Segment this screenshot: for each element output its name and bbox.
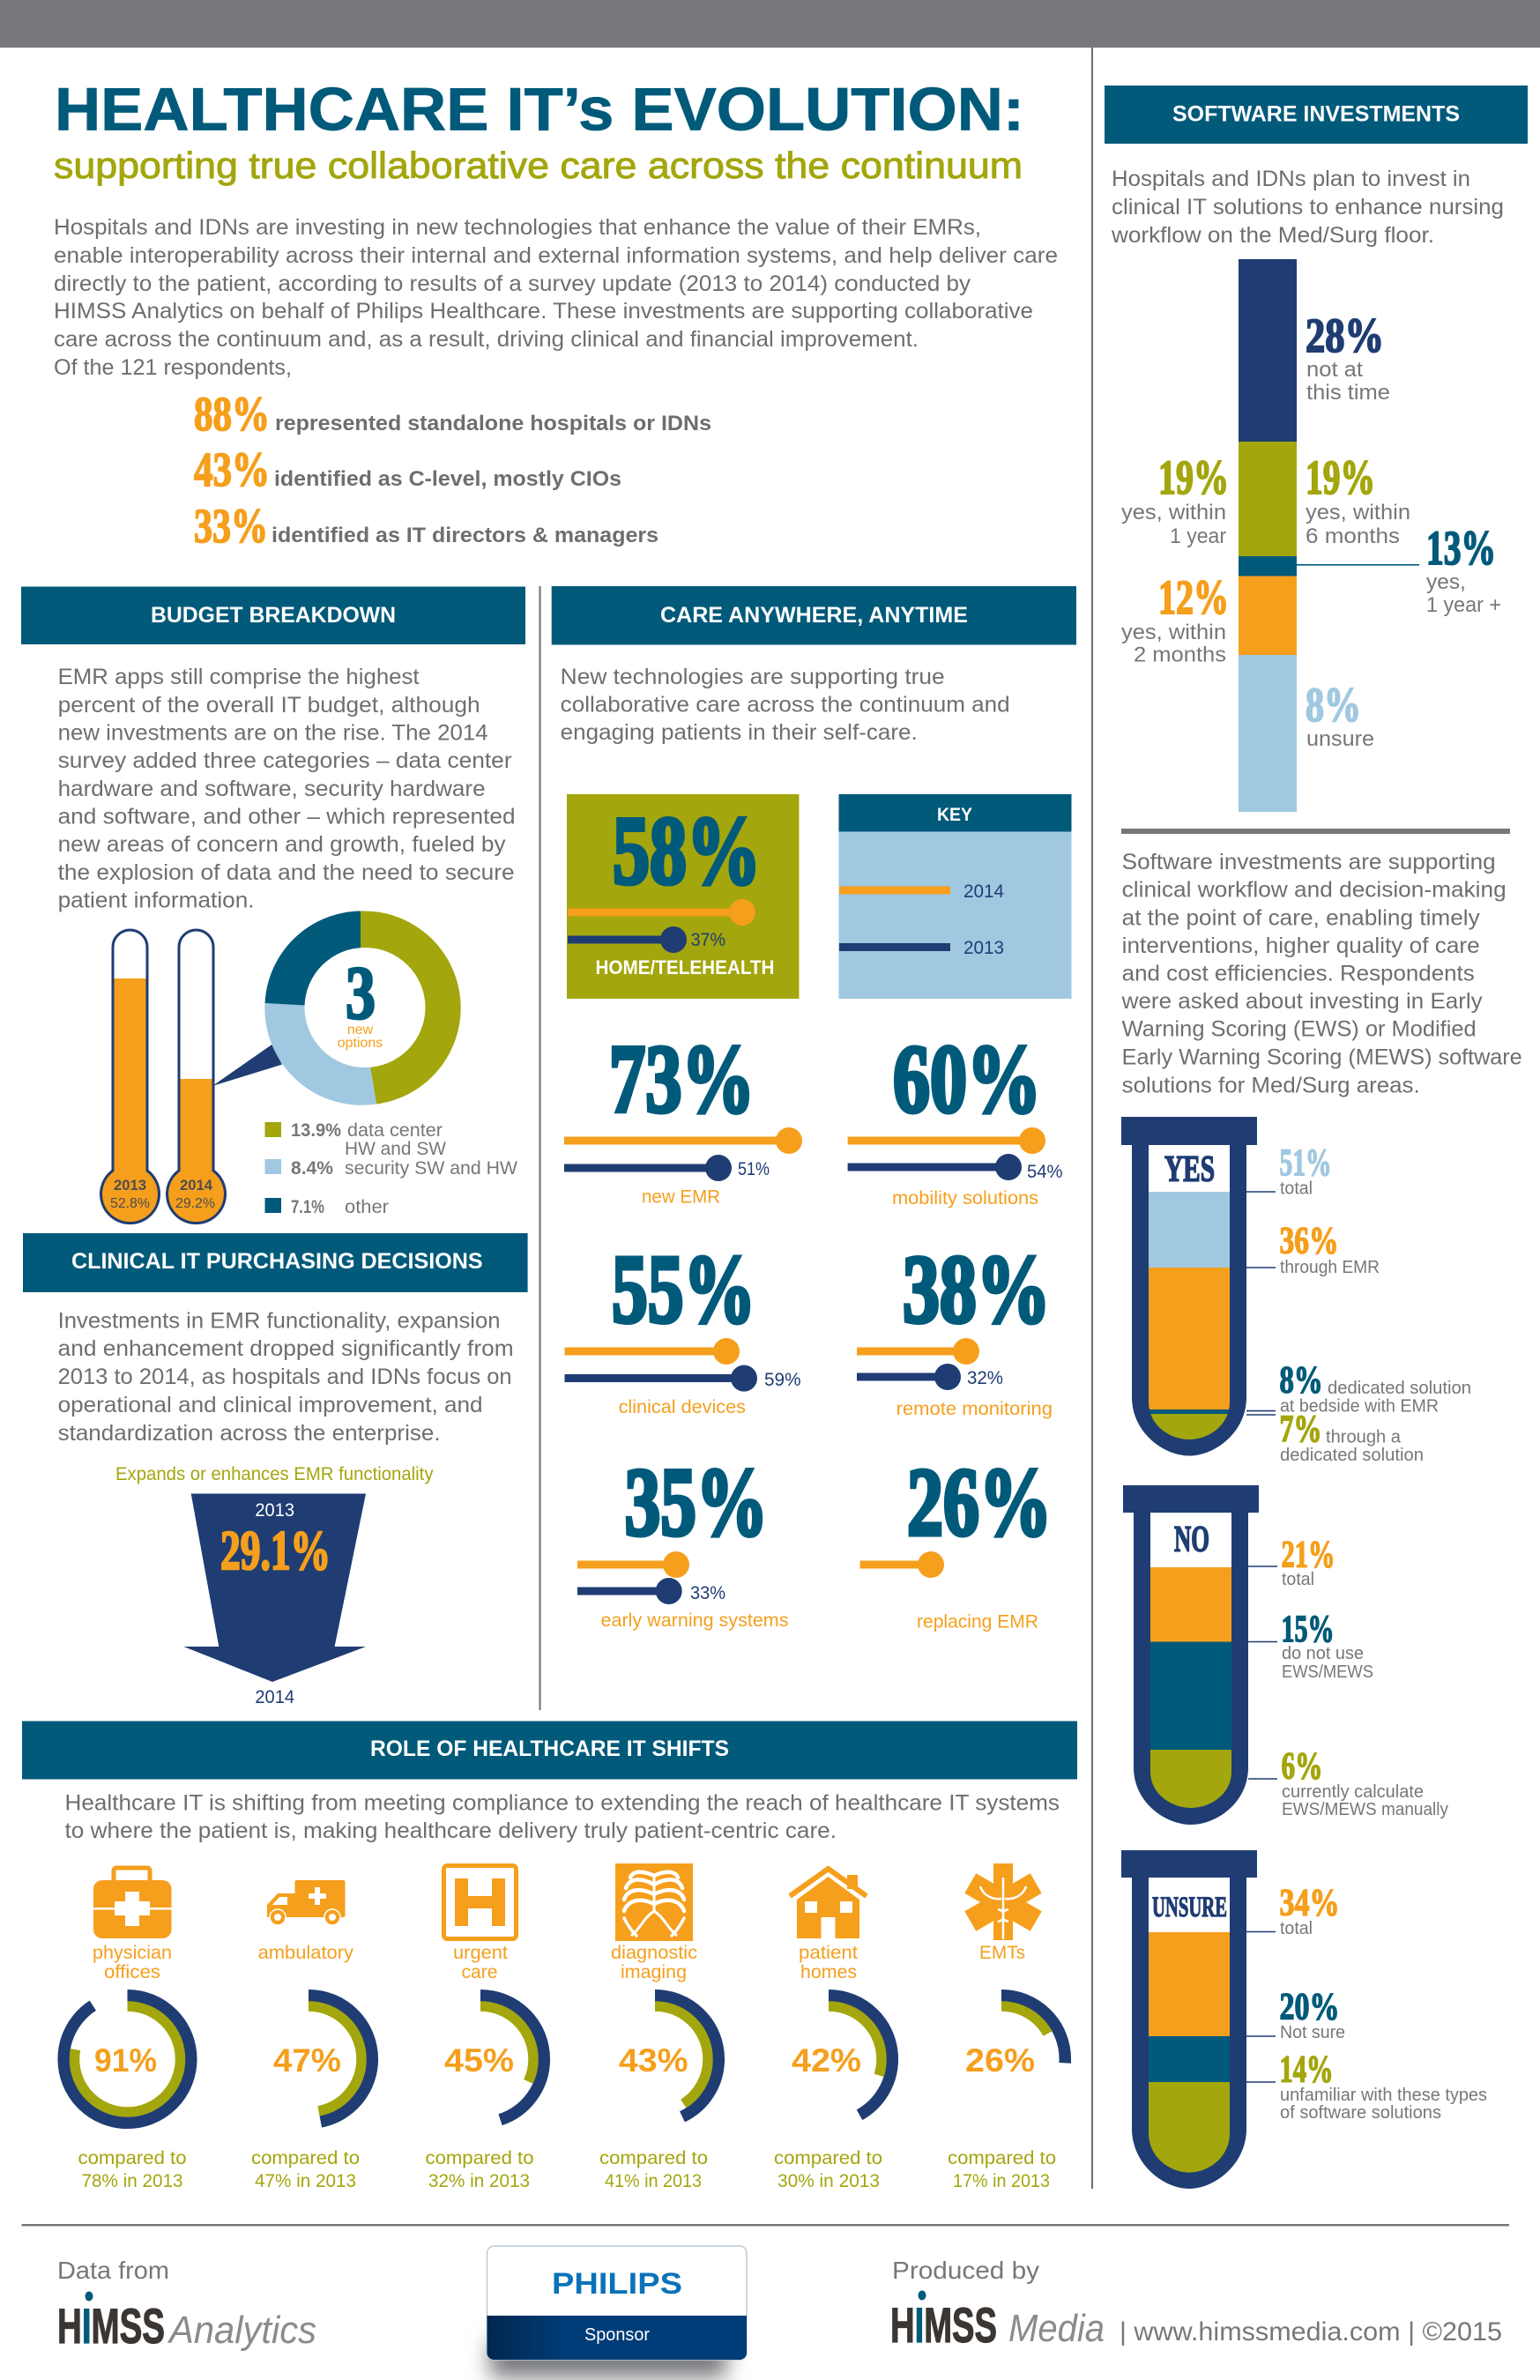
EWS text block: were asked about investing in Early <box>1121 989 1483 1014</box>
column labels: ambulatory <box>258 1943 354 1963</box>
unsure labels <box>1280 1883 1487 2123</box>
no labels: 15% <box>1282 1609 1335 1650</box>
respondent statistics: 88% <box>194 387 270 441</box>
bar label: 19% within 1 year: yes, within <box>1121 501 1226 524</box>
2013 comparison captions: 47% in 2013 <box>255 2171 356 2191</box>
unsure labels: 34% <box>1280 1883 1340 1923</box>
stat: new EMR 73%: 73% <box>609 1025 755 1133</box>
yes labels: 7% <box>1280 1409 1322 1450</box>
stat: mobility solutions 60%: 60% <box>893 1025 1041 1133</box>
bar label: 19% within 1 year: 19% <box>1158 450 1229 504</box>
stat: early warning systems 35%: 33% <box>690 1583 725 1603</box>
clinical text block: operational and clinical improvement, and <box>58 1393 483 1417</box>
bar label: 8% unsure: unsure <box>1306 727 1374 751</box>
bar label: 12% within 2 months: yes, within <box>1121 621 1226 644</box>
radial chart: EMTs 26% <box>938 1996 1065 2123</box>
respondent statistics: 43% <box>194 443 270 496</box>
down arrow: 29.1%: 2013 <box>255 1500 294 1521</box>
down arrow: 29.1%: 29.1% <box>220 1520 331 1581</box>
no labels: 21% <box>1282 1534 1335 1576</box>
care text block: engaging patients in their self-care. <box>561 720 918 745</box>
no labels: total <box>1282 1570 1314 1589</box>
stat: replacing EMR 26%: 26% <box>907 1448 1052 1556</box>
budget text block: and software, and other – which represented <box>58 804 516 829</box>
yes labels: through a <box>1326 1428 1402 1447</box>
radial chart: diagnostic imaging 43% <box>591 1996 718 2123</box>
unsure labels: 20% <box>1280 1987 1340 2027</box>
stat: remote monitoring 38%: remote monitoring <box>896 1399 1053 1419</box>
2013 comparison captions: compared to <box>774 2148 882 2168</box>
respondent statistics: identified as IT directors & managers <box>272 524 658 547</box>
thermometer: 2013: 2013 <box>114 1177 146 1194</box>
test tube: yes: YES <box>1164 1149 1215 1190</box>
panel: software investments <box>1105 86 1528 2189</box>
EWS text block <box>1121 850 1522 1098</box>
budget text block: new areas of concern and growth, fueled by <box>58 832 506 857</box>
2013 comparison captions: 78% in 2013 <box>81 2171 183 2191</box>
unsure labels: of software solutions <box>1280 2103 1441 2123</box>
donut legend: security SW and HW <box>345 1158 517 1179</box>
EWS text block: at the point of care, enabling timely <box>1122 906 1480 931</box>
donut chart: 3 new options: 3 <box>346 950 376 1035</box>
stat: clinical devices 55%: clinical devices <box>619 1397 746 1417</box>
2013 comparison captions: 41% in 2013 <box>605 2171 702 2191</box>
stat: early warning systems 35%: 35% <box>625 1448 768 1556</box>
donut legend: 7.1% <box>291 1197 324 1217</box>
software text block: workflow on the Med/Surg floor. <box>1111 223 1434 248</box>
yes labels: at bedside with EMR <box>1280 1397 1439 1417</box>
footer: produced by HIMSS Media: HIMSS <box>890 2297 997 2353</box>
clinical text block: standardization across the enterprise. <box>58 1421 441 1446</box>
no labels: EWS/MEWS <box>1282 1662 1373 1682</box>
donut chart: 3 new options: options <box>338 1036 383 1051</box>
bar label: 13% 1 year plus: 1 year + <box>1426 593 1501 617</box>
budget text block <box>58 665 516 913</box>
care text block <box>561 665 1010 745</box>
footer: data from HIMSS Analytics: Analytics <box>167 2309 316 2352</box>
radial chart: urgent care 45%: 45% <box>444 2042 514 2079</box>
column labels: offices <box>104 1962 160 1982</box>
donut chart: 3 new options: new <box>347 1023 374 1038</box>
icon: rib cage x-ray <box>615 1863 693 1941</box>
panel: role of healthcare IT shifts <box>22 1721 1077 2191</box>
unsure labels: unfamiliar with these types <box>1280 2086 1487 2105</box>
2013 comparison captions: compared to <box>78 2148 187 2168</box>
icon: patient home <box>790 1869 867 1938</box>
stat: clinical devices 55%: 59% <box>764 1370 800 1390</box>
respondent statistics: represented standalone hospitals or IDNs <box>275 412 711 435</box>
bar label: 19% within 1 year <box>1121 450 1229 548</box>
radial chart: physician offices 91%: 91% <box>94 2042 157 2079</box>
EWS text block: Software investments are supporting <box>1122 850 1496 874</box>
column labels: care <box>462 1962 497 1982</box>
bar label: 13% 1 year plus <box>1426 521 1501 617</box>
footer: produced by HIMSS Media <box>890 2257 1502 2353</box>
thermometer: 2013 <box>100 930 160 1223</box>
radial chart: diagnostic imaging 43%: 43% <box>619 2042 688 2079</box>
budget text block: EMR apps still comprise the highest <box>58 665 420 689</box>
bar label: 28% not at this time: this time <box>1306 381 1390 405</box>
heading: budget breakdown: BUDGET BREAKDOWN <box>151 603 396 628</box>
bar label: 19% within 6 months: yes, within <box>1306 501 1410 524</box>
clinical text block: Investments in EMR functionality, expansion <box>58 1308 501 1333</box>
clinical text block <box>58 1308 514 1446</box>
stat: mobility solutions 60%: mobility solutions <box>892 1188 1038 1209</box>
heading: role of healthcare IT shifts: ROLE OF HEALTHCARE IT SHIFTS <box>370 1737 729 1761</box>
stat: mobility solutions 60% <box>848 1025 1063 1209</box>
panel: clinical IT purchasing decisions <box>23 1233 528 1707</box>
stat card: home/telehealth 58%: HOME/TELEHEALTH <box>596 956 774 978</box>
bar label: 28% not at this time <box>1306 309 1390 405</box>
heading: care anywhere: CARE ANYWHERE, ANYTIME <box>660 603 968 628</box>
heading: software investments: SOFTWARE INVESTMENTS <box>1172 102 1460 127</box>
stat: new EMR 73%: new EMR <box>642 1187 720 1208</box>
stat: replacing EMR 26% <box>860 1448 1052 1633</box>
donut chart: 3 new options <box>264 911 461 1105</box>
donut legend: 13.9% <box>291 1120 341 1141</box>
title: HEALTHCARE IT’s EVOLUTION: <box>55 76 1024 143</box>
icon: ambulance <box>267 1880 346 1925</box>
icon: star of life <box>964 1863 1042 1940</box>
test tube: unsure <box>1121 1850 1276 2189</box>
footer: data from HIMSS Analytics <box>57 2257 316 2354</box>
yes labels: through EMR <box>1280 1258 1380 1277</box>
bar label: 19% within 6 months <box>1306 450 1410 548</box>
no labels: 6% <box>1282 1745 1322 1788</box>
role text block <box>65 1791 1060 1843</box>
key: KEY <box>937 805 972 825</box>
budget text block: survey added three categories – data center <box>58 748 512 773</box>
stat: remote monitoring 38%: 32% <box>967 1368 1003 1388</box>
stat: clinical devices 55%: 55% <box>612 1236 755 1343</box>
respondent statistics: identified as C-level, mostly CIOs <box>274 467 621 491</box>
radial chart: EMTs 26%: 26% <box>965 2042 1035 2079</box>
software text block <box>1111 167 1504 248</box>
stat: new EMR 73%: 51% <box>738 1159 770 1179</box>
column labels: patient <box>799 1943 858 1963</box>
heading: role of healthcare IT shifts <box>22 1721 1077 1779</box>
column labels: physician <box>93 1943 172 1963</box>
bar label: 13% 1 year plus: yes, <box>1426 570 1466 594</box>
column labels: imaging <box>621 1962 687 1982</box>
icon: urgent care H <box>444 1865 517 1939</box>
sponsor card: Philips <box>487 2246 747 2377</box>
footer: produced by HIMSS Media: Media <box>1008 2307 1105 2350</box>
respondent statistics: 33% <box>194 499 268 553</box>
intro text block: care across the continuum and, as a result, driving clinical and financial improvement. <box>54 327 919 352</box>
bar label: 19% within 6 months: 19% <box>1306 450 1375 504</box>
test tube: no: NO <box>1174 1520 1209 1560</box>
no labels: EWS/MEWS manually <box>1282 1800 1448 1819</box>
radial chart: physician offices 91% <box>63 1996 191 2123</box>
intro text block: Of the 121 respondents, <box>54 355 292 380</box>
software text block: clinical IT solutions to enhance nursing <box>1112 195 1504 219</box>
bar label: 28% not at this time: 28% <box>1306 309 1384 362</box>
yes labels: total <box>1280 1179 1313 1199</box>
test tube: unsure: UNSURE <box>1152 1892 1227 1923</box>
stat: mobility solutions 60%: 54% <box>1027 1162 1063 1182</box>
EWS text block: interventions, higher quality of care <box>1122 933 1480 958</box>
2013 comparison captions: 32% in 2013 <box>428 2171 530 2191</box>
yes labels: 8% <box>1280 1359 1322 1402</box>
panel: care anywhere, anytime <box>552 586 1076 1633</box>
test tube: yes <box>1121 1117 1276 1456</box>
unsure labels: 14% <box>1280 2049 1333 2091</box>
key: 2014 <box>963 881 1004 902</box>
budget text block: new investments are on the rise. The 2014 <box>58 721 488 746</box>
2013 comparison captions: compared to <box>251 2148 360 2168</box>
EWS text block: and cost efficiencies. Respondents <box>1122 962 1475 986</box>
respondent statistics <box>194 387 711 553</box>
key: 2013 <box>963 938 1004 958</box>
software text block: Hospitals and IDNs plan to invest in <box>1112 167 1470 191</box>
no labels: currently calculate <box>1282 1782 1424 1802</box>
role text block: Healthcare IT is shifting from meeting compliance to extending the reach of healthcare IT systems <box>65 1791 1060 1816</box>
intro text block: HIMSS Analytics on behalf of Philips Healthcare. These investments are supporting collaborative <box>54 299 1033 324</box>
heading: care anywhere <box>552 586 1076 645</box>
EWS text block: Warning Scoring (EWS) or Modified <box>1122 1017 1477 1042</box>
test tube: no <box>1123 1485 1277 1825</box>
care text block: collaborative care across the continuum and <box>561 693 1010 718</box>
radial chart: patient homes 42%: 42% <box>792 2042 861 2079</box>
column labels: homes <box>800 1962 857 1982</box>
2013 comparison captions: compared to <box>948 2148 1056 2168</box>
heading: clinical IT purchasing decisions <box>23 1233 528 1292</box>
2013 comparison captions: 17% in 2013 <box>953 2171 1050 2191</box>
thermometer: 2014 <box>167 930 226 1223</box>
key <box>839 794 1072 999</box>
sponsor card: Philips: PHILIPS <box>552 2267 682 2301</box>
stat card: home/telehealth 58% <box>567 794 799 999</box>
column labels <box>93 1943 1025 1982</box>
donut legend: HW and SW <box>345 1139 446 1159</box>
bar label: 8% unsure: 8% <box>1306 678 1361 732</box>
footer: data from HIMSS Analytics: Data from <box>57 2257 169 2284</box>
stat: remote monitoring 38%: 38% <box>903 1236 1051 1343</box>
footer: produced by HIMSS Media: Produced by <box>892 2257 1039 2284</box>
subtitle: supporting true collaborative care across the continuum <box>54 145 1023 186</box>
2013 comparison captions <box>78 2148 1056 2191</box>
bar label: 28% not at this time: not at <box>1306 358 1363 382</box>
radial chart: ambulatory 47% <box>245 1996 372 2123</box>
thermometer: 2014: 29.2% <box>175 1196 215 1211</box>
clinical text block: and enhancement dropped significantly from <box>58 1336 514 1361</box>
donut legend <box>264 1120 517 1217</box>
bar label: 12% within 2 months: 2 months <box>1134 643 1226 666</box>
intro text block <box>54 215 1058 380</box>
EWS text block: solutions for Med/Surg areas. <box>1122 1074 1420 1098</box>
donut legend: 8.4% <box>291 1158 333 1179</box>
thermometer: 2013: 52.8% <box>110 1196 150 1211</box>
unsure labels: Not sure <box>1280 2023 1345 2042</box>
icon: medical case <box>93 1868 171 1938</box>
EWS text block: Early Warning Scoring (MEWS) software <box>1122 1045 1522 1070</box>
yes labels: dedicated solution <box>1280 1446 1424 1465</box>
down arrow: 29.1% <box>183 1493 366 1707</box>
radial chart: urgent care 45% <box>417 1996 544 2123</box>
stat: replacing EMR 26%: replacing EMR <box>917 1611 1038 1633</box>
donut legend: data center <box>347 1120 443 1141</box>
bar label: 19% within 1 year: 1 year <box>1170 524 1226 548</box>
stat card: home/telehealth 58%: 58% <box>613 797 761 904</box>
intro text block: enable interoperability across their internal and external information systems, and help deliver care <box>54 243 1058 268</box>
stat: early warning systems 35%: early warning systems <box>601 1610 788 1631</box>
2013 comparison captions: compared to <box>599 2148 708 2168</box>
thermometer: 2014: 2014 <box>180 1177 213 1194</box>
yes labels <box>1280 1142 1471 1465</box>
column labels: EMTs <box>979 1943 1025 1963</box>
care text block: New technologies are supporting true <box>561 665 945 689</box>
budget text block: hardware and software, security hardware <box>58 777 486 801</box>
EWS text block: clinical workflow and decision-making <box>1122 878 1507 903</box>
stat: clinical devices 55% <box>564 1236 800 1417</box>
intro text block: Hospitals and IDNs are investing in new technologies that enhance the value of their EMRs, <box>54 215 981 240</box>
stat: early warning systems 35% <box>577 1448 788 1631</box>
heading: budget breakdown <box>21 587 525 644</box>
stacked bar chart <box>1239 259 1419 812</box>
stat: new EMR 73% <box>564 1025 802 1208</box>
column labels: diagnostic <box>611 1943 697 1963</box>
clinical text block: 2013 to 2014, as hospitals and IDNs focus on <box>58 1365 512 1389</box>
donut legend: other <box>345 1197 389 1217</box>
role text block: to where the patient is, making healthcare delivery truly patient-centric care. <box>65 1818 837 1843</box>
2013 comparison captions: 30% in 2013 <box>777 2171 880 2191</box>
radial chart: ambulatory 47%: 47% <box>273 2042 341 2079</box>
sponsor card: Philips: Sponsor <box>584 2325 650 2345</box>
panel: budget breakdown <box>21 587 525 1223</box>
bar label: 19% within 6 months: 6 months <box>1306 524 1400 548</box>
budget text block: patient information. <box>58 889 255 913</box>
stat: remote monitoring 38% <box>857 1236 1053 1419</box>
column labels: urgent <box>453 1943 508 1963</box>
radial chart: patient homes 42% <box>765 1996 892 2123</box>
budget text block: the explosion of data and the need to secure <box>58 860 515 885</box>
footer: produced by HIMSS Media: | www.himssmedia.com | ©2015 <box>1120 2317 1502 2347</box>
heading: clinical IT purchasing decisions: CLINICAL IT PURCHASING DECISIONS <box>71 1249 483 1274</box>
unsure labels: total <box>1280 1919 1313 1938</box>
yes labels: 36% <box>1280 1220 1338 1262</box>
stat card: home/telehealth 58%: 37% <box>691 930 725 950</box>
callout pointer <box>212 1045 282 1086</box>
intro text block: directly to the patient, according to results of a survey update (2013 to 2014) conducted by <box>54 271 971 296</box>
arrow caption: Expands or enhances EMR functionality <box>115 1464 434 1484</box>
footer: data from HIMSS Analytics: HIMSS <box>57 2298 165 2354</box>
yes labels: dedicated solution <box>1328 1379 1471 1398</box>
bar label: 12% within 2 months: 12% <box>1158 570 1229 624</box>
yes labels: 51% <box>1280 1142 1331 1184</box>
bar label: 12% within 2 months <box>1121 570 1229 666</box>
heading: software investments <box>1105 86 1528 144</box>
2013 comparison captions: compared to <box>425 2148 534 2168</box>
budget text block: percent of the overall IT budget, although <box>58 693 480 718</box>
down arrow: 29.1%: 2014 <box>255 1687 294 1707</box>
no labels <box>1282 1534 1448 1819</box>
no labels: do not use <box>1282 1644 1364 1663</box>
bar label: 13% 1 year plus: 13% <box>1426 521 1496 575</box>
